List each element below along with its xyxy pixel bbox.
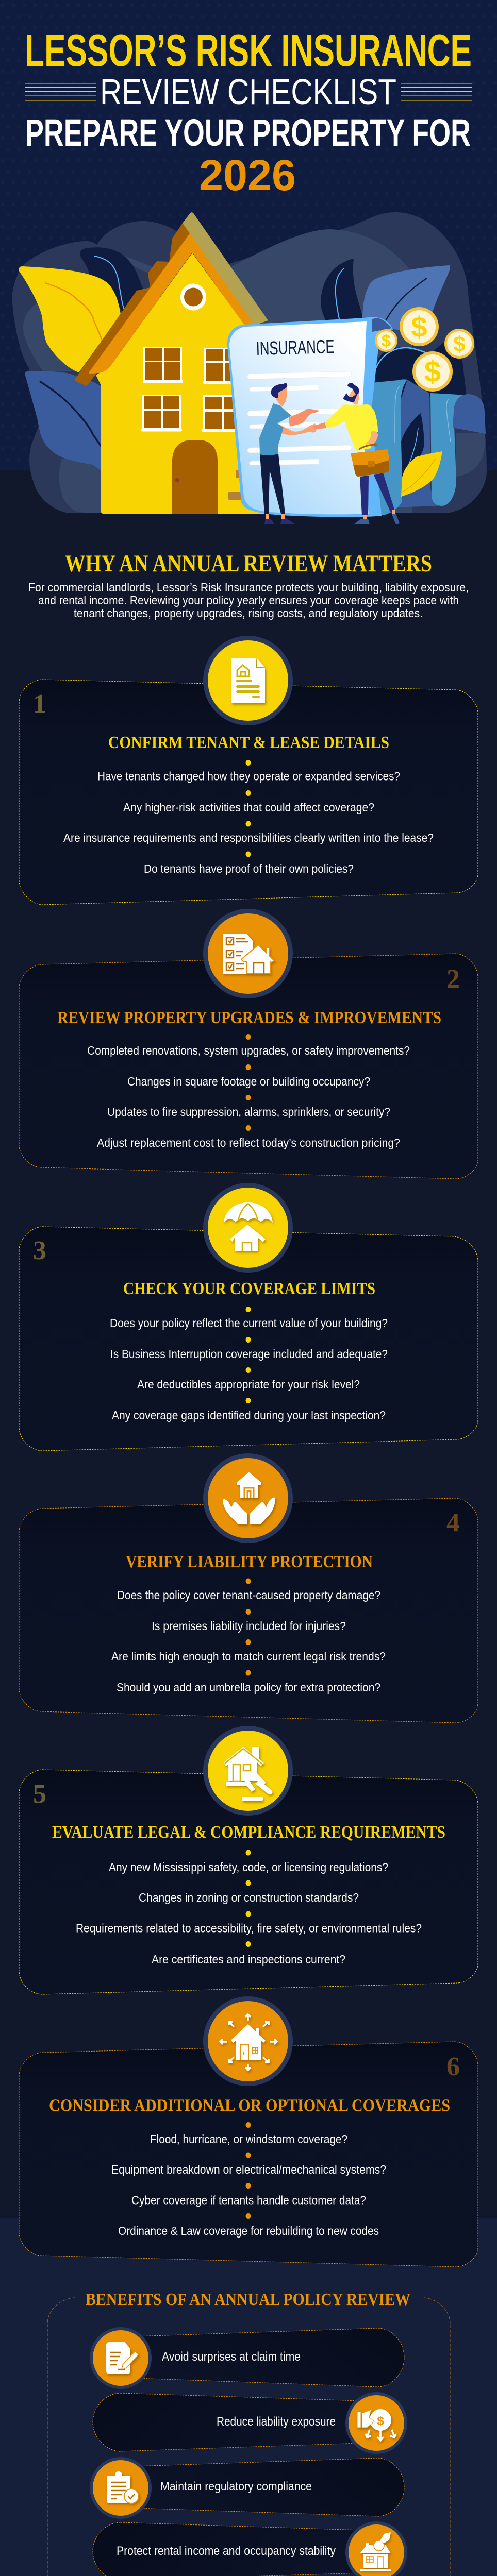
right scroll back [371, 330, 486, 515]
checklist [110, 1307, 388, 1422]
checklist: Flood, hurricane, or windstorm coverage? [150, 2132, 347, 2146]
step number: 3 [33, 1236, 46, 1265]
left leaves [19, 247, 143, 471]
checklist: Changes in zoning or construction standards? [139, 1891, 359, 1904]
checklist: Are certificates and inspections current? [152, 1953, 345, 1966]
door [172, 440, 218, 514]
checklist [111, 1579, 386, 1694]
checklist: Do tenants have proof of their own policies? [144, 862, 354, 875]
checklist: Requirements related to accessibility, fire safety, or environmental rules? [76, 1922, 422, 1935]
man left [259, 383, 320, 524]
coins [375, 307, 474, 392]
checklist: Any new Mississippi safety, code, or licensing regulations? [109, 1860, 388, 1874]
subtitle with stripes: REVIEW CHECKLIST [100, 72, 396, 112]
benefit: regulatory compliance [90, 2457, 404, 2519]
step number: 1 [33, 689, 46, 719]
house [74, 212, 268, 514]
checklist [87, 1034, 410, 1149]
benefit: protect rental income [93, 2521, 407, 2576]
document heading: INSURANCE [256, 336, 335, 359]
benefit: regulatory compliance: Maintain regulatory compliance [160, 2480, 312, 2494]
step number: 5 [33, 1780, 46, 1809]
panel 6: consider additional or optional coverages [19, 1996, 478, 2267]
heading: CHECK YOUR COVERAGE LIMITS [123, 1279, 375, 1298]
checklist: Are deductibles appropriate for your risk level? [137, 1378, 360, 1391]
checklist: Does the policy cover tenant-caused property damage? [117, 1588, 380, 1602]
checklist: Ordinance & Law coverage for rebuilding to new codes [118, 2224, 379, 2238]
checklist: Completed renovations, system upgrades, or safety improvements? [87, 1044, 410, 1057]
checklist: Cyber coverage if tenants handle customer data? [131, 2194, 366, 2207]
checklist: Should you add an umbrella policy for extra protection? [117, 1681, 380, 1694]
background blobs [12, 212, 487, 513]
panel 2: review property upgrades and improvements [19, 909, 478, 1179]
benefit: reduce liability: $ [377, 2414, 384, 2428]
intro paragraph: and rental income. Reviewing your policy yearly ensures your coverage keeps pace with [38, 594, 459, 607]
checklist: Any higher-risk activities that could affect coverage? [123, 801, 374, 814]
briefcase [351, 445, 389, 477]
heading: EVALUATE LEGAL & COMPLIANCE REQUIREMENTS [52, 1823, 445, 1842]
checklist: Have tenants changed how they operate or expanded services? [97, 770, 400, 783]
checklist: Adjust replacement cost to reflect today’s construction pricing? [97, 1136, 400, 1149]
heading: CONSIDER ADDITIONAL OR OPTIONAL COVERAGES [49, 2096, 450, 2115]
checklist: Is premises liability included for injuries? [152, 1619, 346, 1633]
panel 1: confirm tenant and lease details [19, 636, 478, 905]
section: why an annual review matters: WHY AN ANNUAL REVIEW MATTERS [65, 550, 432, 577]
step number: 4 [446, 1508, 460, 1537]
coins: $ [424, 355, 441, 388]
checklist [63, 760, 434, 875]
checklist [76, 1850, 422, 1966]
checklist: Are limits high enough to match current legal risk trends? [111, 1650, 386, 1663]
intro paragraph: For commercial landlords, Lessor’s Risk Insurance protects your building, liability exposure, [28, 581, 469, 594]
benefit: avoid surprises: Avoid surprises at claim time [162, 2350, 301, 2364]
benefit: avoid surprises [90, 2327, 404, 2389]
panel 3: check your coverage limits [19, 1183, 478, 1451]
title [25, 25, 472, 199]
heading: VERIFY LIABILITY PROTECTION [126, 1552, 373, 1571]
checklist: Is Business Interruption coverage included and adequate? [110, 1347, 388, 1361]
benefit: reduce liability: Reduce liability exposure [217, 2415, 336, 2429]
icon: house and gavel [203, 1726, 293, 1816]
panel 4: verify liability protection [19, 1453, 478, 1723]
document lines [247, 371, 352, 465]
icon: umbrella over house [203, 1183, 293, 1273]
heading: CONFIRM TENANT & LEASE DETAILS [108, 733, 389, 752]
icon: hands holding house [203, 1453, 293, 1543]
checklist: Updates to fire suppression, alarms, sprinklers, or security? [107, 1105, 390, 1118]
heading: BENEFITS OF AN ANNUAL POLICY REVIEW [86, 2290, 410, 2309]
checklist: Equipment breakdown or electrical/mechanical systems? [111, 2163, 386, 2176]
step number: 6 [446, 2052, 460, 2081]
icon: house document [203, 636, 293, 725]
checklist: Are insurance requirements and responsibilities clearly written into the lease? [63, 831, 434, 844]
icon: checklist and house [203, 909, 293, 998]
windows [141, 347, 236, 432]
icon: house with arrows [203, 1996, 293, 2086]
coins: $ [411, 311, 427, 343]
title: 2026 [199, 151, 296, 199]
intro paragraph [28, 581, 469, 620]
coins: $ [453, 332, 466, 356]
hero illustration [12, 212, 487, 524]
panel 5: evaluate legal and compliance requirements [19, 1726, 478, 1994]
coins: $ [382, 331, 391, 350]
man right [313, 383, 400, 524]
panel: benefits of an annual policy review [47, 2290, 450, 2576]
benefit: reduce liability [93, 2392, 407, 2454]
checklist: Any coverage gaps identified during your last inspection? [112, 1409, 386, 1422]
checklist [111, 2122, 386, 2238]
checklist: Does your policy reflect the current value of your building? [110, 1316, 388, 1330]
step number: 2 [446, 964, 460, 994]
section: why an annual review matters [28, 550, 469, 620]
benefit: protect rental income: Protect rental income and occupancy stability [117, 2544, 336, 2558]
round window [180, 283, 206, 310]
heading: REVIEW PROPERTY UPGRADES & IMPROVEMENTS [57, 1008, 441, 1027]
insurance document [227, 317, 393, 517]
right leaves [321, 259, 450, 330]
checklist: Changes in square footage or building occupancy? [127, 1075, 370, 1088]
intro paragraph: tenant changes, property upgrades, rising costs, and regulatory updates. [74, 606, 423, 620]
